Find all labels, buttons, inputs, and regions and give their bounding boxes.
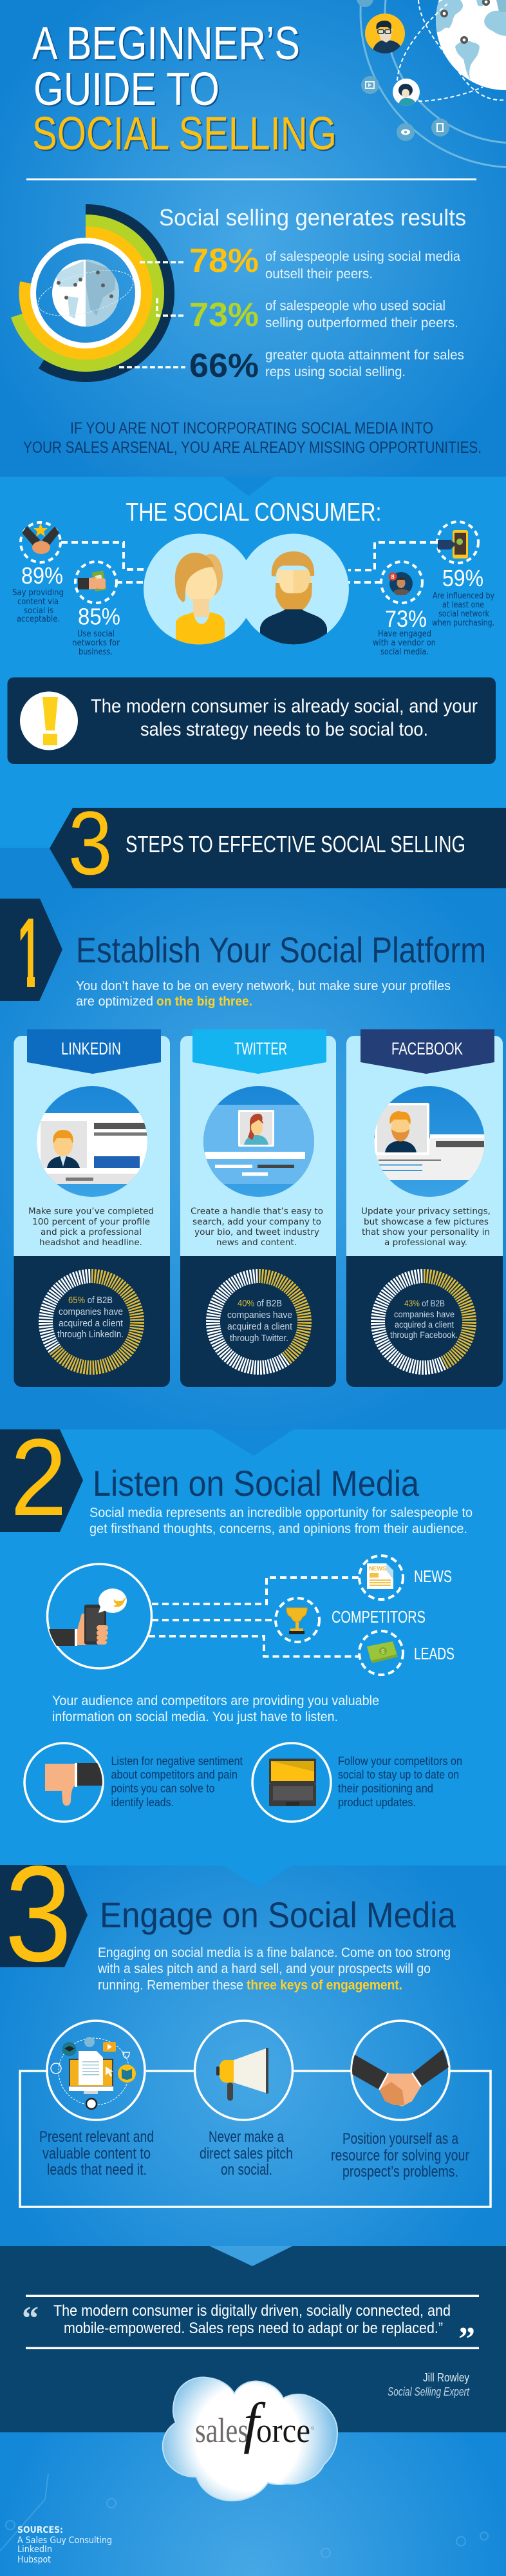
quote: “ <box>22 2300 39 2337</box>
text: LinkedIn tips: headshot and headline. <box>39 1238 142 1248</box>
stat: 78% <box>189 242 460 281</box>
icon: megaphone <box>194 2021 292 2120</box>
stat: 66% <box>189 347 464 385</box>
stat: 73%: of salespeople who used social <box>265 299 445 313</box>
panel: quote band <box>0 2246 506 2432</box>
text: key 1 <box>39 2128 154 2179</box>
illustration: man <box>246 533 349 644</box>
stat: 85%: Use social <box>77 629 115 639</box>
stat: 73% <box>189 296 458 334</box>
panel: LinkedIn card <box>14 1029 170 1387</box>
icon: money stack: $ <box>381 1648 385 1655</box>
text: sources: Hubspot <box>17 2555 51 2565</box>
text: step 1 intro: You don’t have to be on every network, but make sure your profiles <box>76 979 451 993</box>
illustration: woman <box>144 533 246 644</box>
stat: 73% consumers: Have engaged <box>378 629 431 639</box>
chart: 65% radial gauge: companies have <box>59 1306 123 1317</box>
text: audience statement: information on social media. You just have to listen. <box>52 1710 338 1724</box>
text: key 2: direct sales pitch <box>200 2145 293 2162</box>
stat: 73% consumers: with a vendor on <box>373 638 436 648</box>
stat: 78%: 78% <box>189 242 259 280</box>
icon: handshake 89% <box>21 522 61 562</box>
chart: 65% radial gauge: acquired a client <box>59 1318 124 1329</box>
chart: 43% radial gauge: companies have <box>394 1309 454 1319</box>
text: follow competitors: their positioning and <box>338 1782 433 1795</box>
stat: 73%: selling outperformed their peers. <box>265 316 458 330</box>
text: step 1 intro <box>76 979 451 1009</box>
panel: step 1 background <box>0 848 506 1429</box>
icon: exclamation mark <box>20 692 78 750</box>
icon: man avatar <box>365 14 405 53</box>
icon: handshake <box>351 2021 449 2120</box>
text: LinkedIn tips <box>28 1207 154 1248</box>
banner: 3 steps <box>50 792 506 893</box>
illustration: Twitter profile <box>200 1086 322 1197</box>
text: step 3 intro: running. Remember these <box>98 1978 243 1993</box>
panel: step 2 background <box>0 1429 506 1865</box>
icon: money stack <box>359 1631 403 1675</box>
quote: The modern consumer is digitally driven, socially connected, and <box>53 2302 451 2320</box>
stat: 59%: 59% <box>442 565 483 591</box>
text: negative sentiment <box>111 1755 243 1809</box>
logo: salesforce cloud: ® <box>311 2426 315 2431</box>
label: leads: LEADS <box>414 1644 454 1663</box>
chart: 65% radial gauge: 65% of B2B <box>68 1295 113 1306</box>
quote: mobile-empowered. Sales reps need to adapt or be replaced.” <box>64 2320 443 2337</box>
text: step 1 intro: are optimized <box>76 995 153 1009</box>
text: audience statement <box>52 1693 379 1724</box>
icon: hand with phone and tweet <box>45 1564 152 1668</box>
text: sources: LinkedIn <box>17 2544 52 2555</box>
icon: relevant content <box>47 2021 145 2120</box>
chart: 43% radial gauge: through Facebook. <box>390 1330 458 1340</box>
stat: 59%: social network <box>438 609 489 619</box>
chart: 65% radial gauge: through LinkedIn. <box>57 1329 124 1340</box>
text: step 1 intro: on the big three. <box>156 995 252 1009</box>
panel: header section background <box>0 0 506 477</box>
stat: 85%: business. <box>79 647 113 657</box>
stat: 85% <box>72 603 120 657</box>
text: Facebook tips <box>361 1207 491 1248</box>
text: key 1: leads that need it. <box>47 2161 147 2179</box>
stat: 89%: content via <box>17 597 59 607</box>
title: GUIDE TO <box>33 64 220 115</box>
text: follow competitors: social to stay up to date on <box>338 1768 459 1781</box>
text: negative sentiment: Listen for negative sentiment <box>111 1755 243 1768</box>
chart: 43% radial gauge: acquired a client <box>395 1319 454 1330</box>
ribbon: Facebook <box>361 1029 494 1074</box>
ribbon: LinkedIn <box>27 1029 161 1074</box>
text: Facebook tips: but showcase a few pictures <box>364 1217 489 1227</box>
stat: 66%: greater quota attainment for sales <box>265 348 464 363</box>
chart: 40% radial gauge: 40% of B2B <box>238 1298 282 1309</box>
text: LinkedIn tips: and pick a professional <box>41 1228 142 1237</box>
text: quote attribution: Social Selling Expert <box>388 2385 470 2398</box>
stat: 59%: at least one <box>442 600 484 610</box>
chart: 40% radial gauge: acquired a client <box>227 1321 293 1332</box>
logo: salesforce cloud: orce <box>256 2411 310 2450</box>
stat: 59%: Are influenced by <box>433 591 494 601</box>
icon: money in hand 85% <box>75 562 117 603</box>
text: follow competitors: product updates. <box>338 1796 416 1809</box>
label: competitors: COMPETITORS <box>332 1607 426 1627</box>
title <box>32 18 337 160</box>
badge: step 2 number: 2 <box>10 1417 67 1539</box>
panel: Facebook card <box>346 1029 503 1387</box>
text: missing opportunities statement: IF YOU ARE NOT INCORPORATING SOCIAL MEDIA INTO <box>70 419 433 437</box>
stat: 78%: of salespeople using social media <box>265 249 460 264</box>
text: key 2: Never make a <box>209 2128 285 2146</box>
icon: vendor avatar 73% <box>381 562 422 603</box>
icon: globe <box>37 260 134 327</box>
badge: step 1 number: 1 <box>17 900 43 1006</box>
stat: 89%: social is <box>24 606 53 616</box>
stat: 59%: when purchasing. <box>432 618 494 628</box>
title: A BEGINNER’S <box>32 18 300 70</box>
chart: 40% radial gauge: companies have <box>227 1310 292 1321</box>
badge: step 1 number <box>0 899 62 1006</box>
text: quote attribution <box>388 2371 470 2398</box>
stat: 73%: 73% <box>189 296 259 334</box>
text: step 2 intro <box>89 1505 473 1536</box>
text: key 3: resource for solving your <box>331 2147 469 2164</box>
logo: salesforce cloud: sales <box>195 2411 248 2450</box>
text: key 1: valuable content to <box>42 2145 151 2162</box>
stat: 85%: networks for <box>72 638 120 648</box>
logo: salesforce cloud <box>163 2378 337 2501</box>
heading: the social consumer: THE SOCIAL CONSUMER: <box>126 499 381 527</box>
text: quote attribution: Jill Rowley <box>423 2371 469 2384</box>
title: SOCIAL SELLING <box>32 108 337 160</box>
ribbon: LinkedIn: LINKEDIN <box>61 1039 121 1058</box>
icon: woman avatar <box>393 79 420 107</box>
text: step 3 intro <box>97 1945 451 1993</box>
text: Twitter tips <box>191 1207 323 1248</box>
badge: step 3 number: 3 <box>5 1837 72 1990</box>
text: Facebook tips: Update your privacy settings, <box>361 1207 491 1216</box>
chart: 43% radial gauge <box>378 1276 469 1368</box>
icon: laptop <box>252 1743 331 1822</box>
text: step 2 intro: get firsthand thoughts, concerns, and opinions from their audience. <box>89 1522 467 1536</box>
connectors: listening dashed lines <box>149 1578 359 1657</box>
panel: footer background <box>0 2432 506 2576</box>
logo: salesforce cloud: f <box>243 2392 266 2455</box>
banner: 3 steps: 3 <box>68 792 112 893</box>
heading: listen on social media: Listen on Social Media <box>93 1463 420 1503</box>
illustration: LinkedIn profile <box>32 1086 155 1197</box>
text: step 3 intro: Engaging on social media is a fine balance. Come on too strong <box>98 1945 451 1960</box>
ribbon: Twitter <box>192 1029 326 1074</box>
text: Twitter tips: news and content. <box>216 1238 297 1248</box>
text: Twitter tips: Create a handle that’s easy to <box>191 1207 323 1216</box>
icon: vendor avatar 73%: 8 <box>391 573 395 580</box>
heading: social selling generates results: Social selling generates results <box>159 204 466 231</box>
chart: concentric stat rings with globe <box>17 209 185 377</box>
text: key 3: prospect’s problems. <box>342 2163 458 2180</box>
quote: ” <box>458 2321 475 2358</box>
label: news: NEWS <box>414 1567 452 1586</box>
text: Facebook tips: that show your personality in <box>362 1228 490 1237</box>
text: Twitter tips: search, add your company to <box>192 1217 321 1227</box>
panel: step 3 background <box>0 1865 506 2246</box>
stat: 89%: acceptable. <box>17 615 60 624</box>
ribbon: Twitter: TWITTER <box>234 1039 287 1058</box>
decoration: network globe top right <box>357 0 506 167</box>
text: follow competitors <box>338 1755 462 1809</box>
icon: trophy <box>276 1598 319 1642</box>
text: negative sentiment: about competitors and pain <box>111 1768 238 1781</box>
text: follow competitors: Follow your competitors on <box>338 1755 462 1768</box>
stat: 59% <box>432 565 494 628</box>
text: Facebook tips: a professional way. <box>384 1238 467 1248</box>
panel: social consumer background <box>0 477 506 848</box>
stat: 73% consumers <box>373 606 436 657</box>
panel: Twitter card <box>180 1029 336 1387</box>
chart: 43% radial gauge: 43% of B2B <box>404 1298 445 1308</box>
text: key 3: Position yourself as a <box>342 2130 459 2148</box>
stat: 89% <box>12 562 64 624</box>
stat: 89%: Say providing <box>12 588 64 598</box>
text: audience statement: Your audience and competitors are providing you valuable <box>52 1693 379 1708</box>
stat: 85%: 85% <box>78 603 120 630</box>
text: step 3 intro: three keys of engagement. <box>247 1978 402 1993</box>
icon: document badge <box>431 119 449 137</box>
stat: 66%: 66% <box>189 347 259 385</box>
text: key 1: Present relevant and <box>39 2128 154 2146</box>
quote <box>22 2295 479 2358</box>
text: key 2: on social. <box>221 2161 272 2179</box>
chart: 65% radial gauge <box>46 1276 137 1368</box>
stat: 78%: outsell their peers. <box>265 267 373 281</box>
text: sources <box>17 2525 112 2565</box>
text: LinkedIn tips: Make sure you’ve completed <box>28 1207 154 1216</box>
connectors: consumer dashed lines <box>61 542 436 582</box>
ribbon: Facebook: FACEBOOK <box>391 1039 463 1058</box>
text: key 3 <box>331 2130 469 2180</box>
stat: 73% consumers: social media. <box>380 647 429 657</box>
icon: news <box>359 1556 403 1599</box>
icon: eye badge <box>397 123 415 141</box>
icon: thumbs down <box>24 1743 104 1822</box>
icon: phone in hand 59% <box>437 522 478 563</box>
chart: 40% radial gauge: through Twitter. <box>230 1333 288 1344</box>
stat: 89%: 89% <box>21 562 63 589</box>
illustration: Facebook profile <box>370 1086 489 1197</box>
stat: 66%: reps using social selling. <box>265 365 406 379</box>
callout: modern consumer <box>8 678 496 764</box>
text: sources: SOURCES: <box>17 2525 63 2535</box>
frame: three keys outline <box>20 2071 491 2207</box>
text: LinkedIn tips: 100 percent of your profile <box>32 1217 150 1227</box>
text: negative sentiment: identify leads. <box>111 1796 174 1809</box>
text: step 2 intro: Social media represents an incredible opportunity for salespeople to <box>89 1505 473 1520</box>
icon: news: NEWS <box>369 1565 386 1572</box>
stat: 73% consumers: 73% <box>385 606 427 632</box>
callout: modern consumer: The modern consumer is already social, and your <box>91 696 478 717</box>
chart: 40% radial gauge <box>213 1276 305 1368</box>
text: negative sentiment: points you can solve to <box>111 1782 215 1795</box>
callout: modern consumer: sales strategy needs to be social too. <box>140 719 428 740</box>
icon: play badge <box>361 76 379 94</box>
text: Twitter tips: your bio, and tweet industry <box>194 1228 319 1237</box>
text: missing opportunities statement <box>23 419 482 457</box>
text: step 3 intro: with a sales pitch and a hard sell, and your prospects will go <box>97 1961 431 1976</box>
heading: engage on social media: Engage on Social Media <box>100 1894 456 1935</box>
text: sources: A Sales Guy Consulting <box>17 2535 112 2546</box>
text: key 2 <box>200 2128 293 2179</box>
